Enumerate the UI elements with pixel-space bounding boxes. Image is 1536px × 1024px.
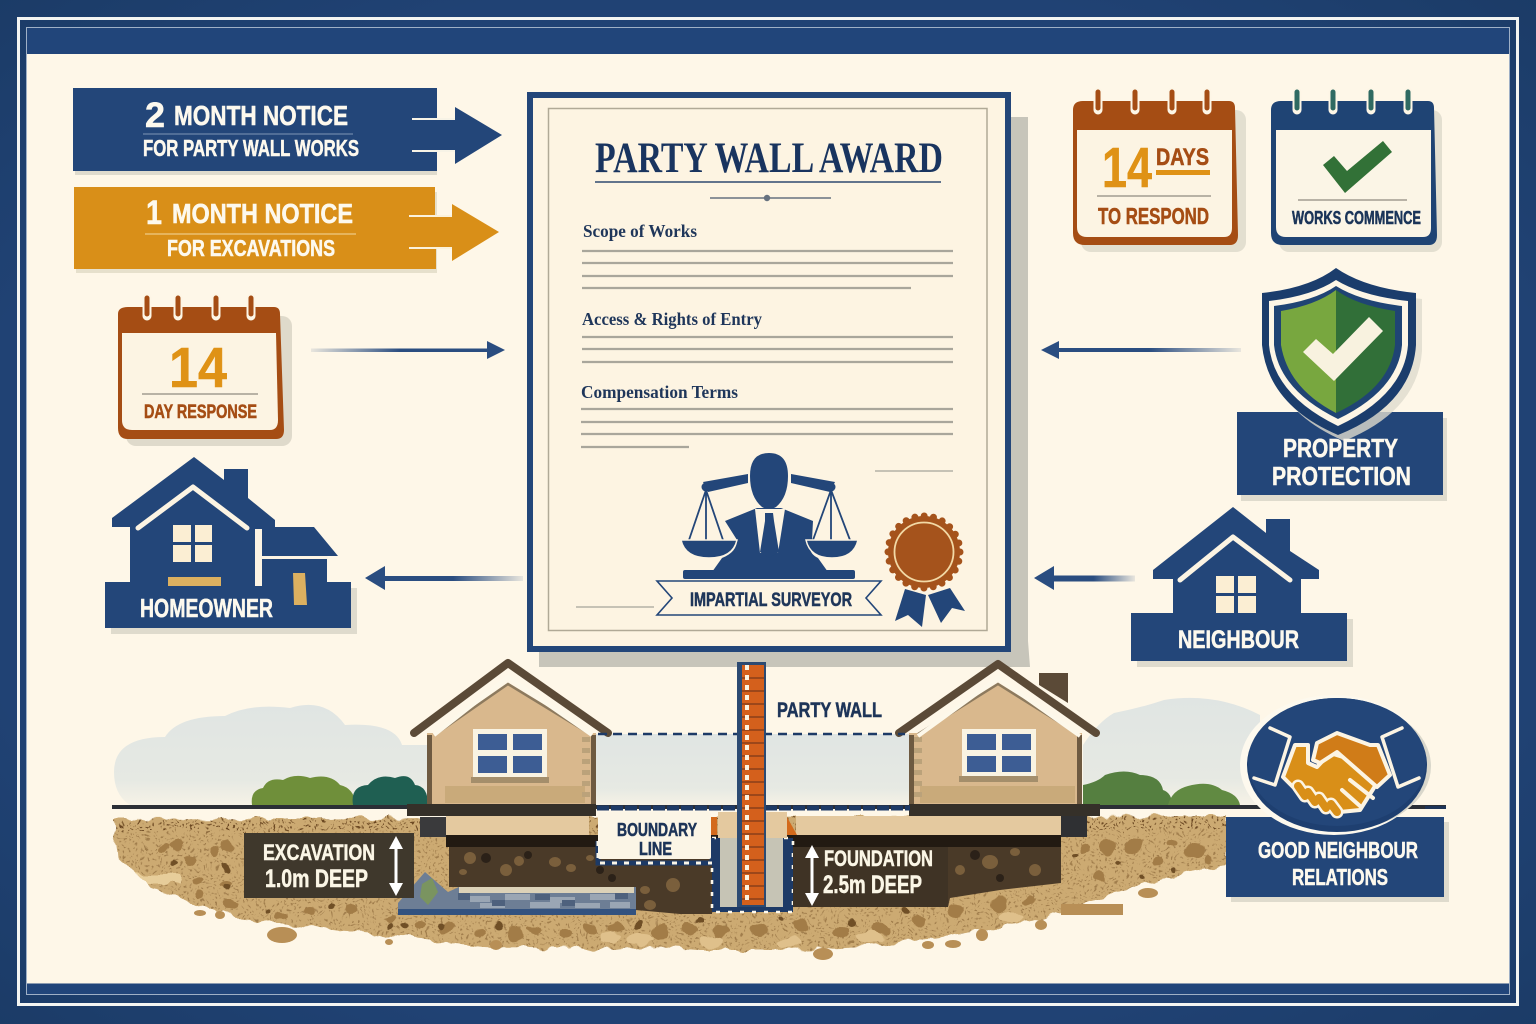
callout: excavation 1.0m deep: 1.0m DEEP: [265, 865, 368, 893]
section: compensation terms: [581, 382, 953, 447]
banner: 1 month notice: MONTH NOTICE: [172, 198, 353, 229]
panel: good neighbour relations: RELATIONS: [1292, 864, 1388, 890]
clouds left: [114, 705, 428, 805]
calendar: 14 days to respond: [1073, 92, 1246, 252]
party wall column: [737, 662, 766, 907]
section: access and rights of entry: [582, 309, 953, 362]
calendar: 14 days to respond: TO RESPOND: [1098, 203, 1209, 229]
banner: 2 month notice: FOR PARTY WALL WORKS: [143, 135, 359, 161]
banner: 2 month notice: [73, 88, 502, 175]
callout: excavation 1.0m deep: [244, 833, 414, 898]
callout: excavation 1.0m deep: EXCAVATION: [263, 840, 375, 865]
document: party wall award: [530, 95, 1030, 667]
ground line: [112, 805, 1446, 809]
bushes left: [252, 776, 428, 805]
ribbon: impartial surveyor: [657, 581, 881, 615]
calendar: works commence: WORKS COMMENCE: [1292, 207, 1421, 228]
panel: good neighbour relations: [1226, 695, 1449, 902]
house left: [407, 663, 608, 837]
document title: PARTY WALL AWARD: [595, 135, 943, 182]
dark excavated soil under houses: [446, 835, 1061, 914]
arrow: property protection to award: [1041, 341, 1241, 359]
calendar: 14 day response: DAY RESPONSE: [144, 401, 257, 423]
section: scope of works: Scope of Works: [583, 221, 697, 241]
sky between houses: [596, 734, 910, 806]
panel: property protection: [1237, 268, 1447, 501]
section: compensation terms: Compensation Terms: [581, 382, 738, 402]
label: boundary line: LINE: [639, 839, 672, 859]
panel: property protection: PROPERTY: [1283, 433, 1398, 463]
stone band: [398, 872, 636, 915]
arrow: award to neighbour: [1034, 566, 1135, 590]
panel: good neighbour relations: GOOD NEIGHBOUR: [1258, 837, 1418, 863]
banner: 1 month notice: FOR EXCAVATIONS: [167, 235, 335, 261]
banner: 1 month notice: [74, 187, 499, 273]
section: access and rights of entry: Access & Rights of Entry: [582, 309, 762, 329]
bushes right: [1083, 772, 1240, 805]
soil: [100, 810, 1240, 960]
callout: foundation 2.5m deep: [793, 845, 948, 907]
label: boundary line: [598, 812, 712, 863]
icon: neighbour house: NEIGHBOUR: [1178, 626, 1299, 654]
document shadow: [539, 117, 1030, 667]
boundary dashed lines: [597, 734, 910, 808]
icon: shield with check: [1262, 268, 1422, 441]
calendar: 14 day response: [118, 298, 292, 446]
callout: foundation 2.5m deep: FOUNDATION: [824, 846, 933, 871]
banner: 1 month notice: 1: [146, 194, 162, 232]
party wall foundation: [711, 812, 797, 912]
icon: seal with ribbons: [888, 516, 965, 627]
callout: foundation 2.5m deep: 2.5m DEEP: [823, 871, 922, 899]
section: scope of works: [582, 221, 953, 288]
icon: impartial surveyor figure with scales: [681, 453, 858, 579]
scene: cross-section of two houses and party wall: [100, 662, 1446, 960]
label: boundary line: BOUNDARY: [617, 820, 697, 840]
icon: neighbour house: [1131, 507, 1353, 667]
loose stones around soil: [194, 888, 1158, 960]
arrow: calendar to award: [311, 341, 505, 359]
clouds right: [1083, 698, 1260, 805]
calendar: 14 day response: 14: [169, 336, 227, 400]
calendar: 14 days to respond: 14: [1102, 136, 1152, 200]
ribbon: impartial surveyor: IMPARTIAL SURVEYOR: [690, 590, 852, 611]
calendar: 14 days to respond: DAYS: [1156, 144, 1209, 171]
icon: homeowner house: HOMEOWNER: [140, 593, 273, 623]
icon: handshake badge: [1240, 695, 1431, 835]
icon: homeowner house: [105, 457, 357, 634]
calendar: works commence: [1271, 92, 1442, 252]
panel: property protection: PROTECTION: [1272, 461, 1411, 491]
label: party wall: PARTY WALL: [777, 699, 882, 722]
arrow: award to homeowner: [365, 566, 523, 590]
banner: 2 month notice: 2: [145, 96, 165, 135]
banner: 2 month notice: MONTH NOTICE: [174, 100, 348, 131]
house right: [796, 664, 1100, 837]
